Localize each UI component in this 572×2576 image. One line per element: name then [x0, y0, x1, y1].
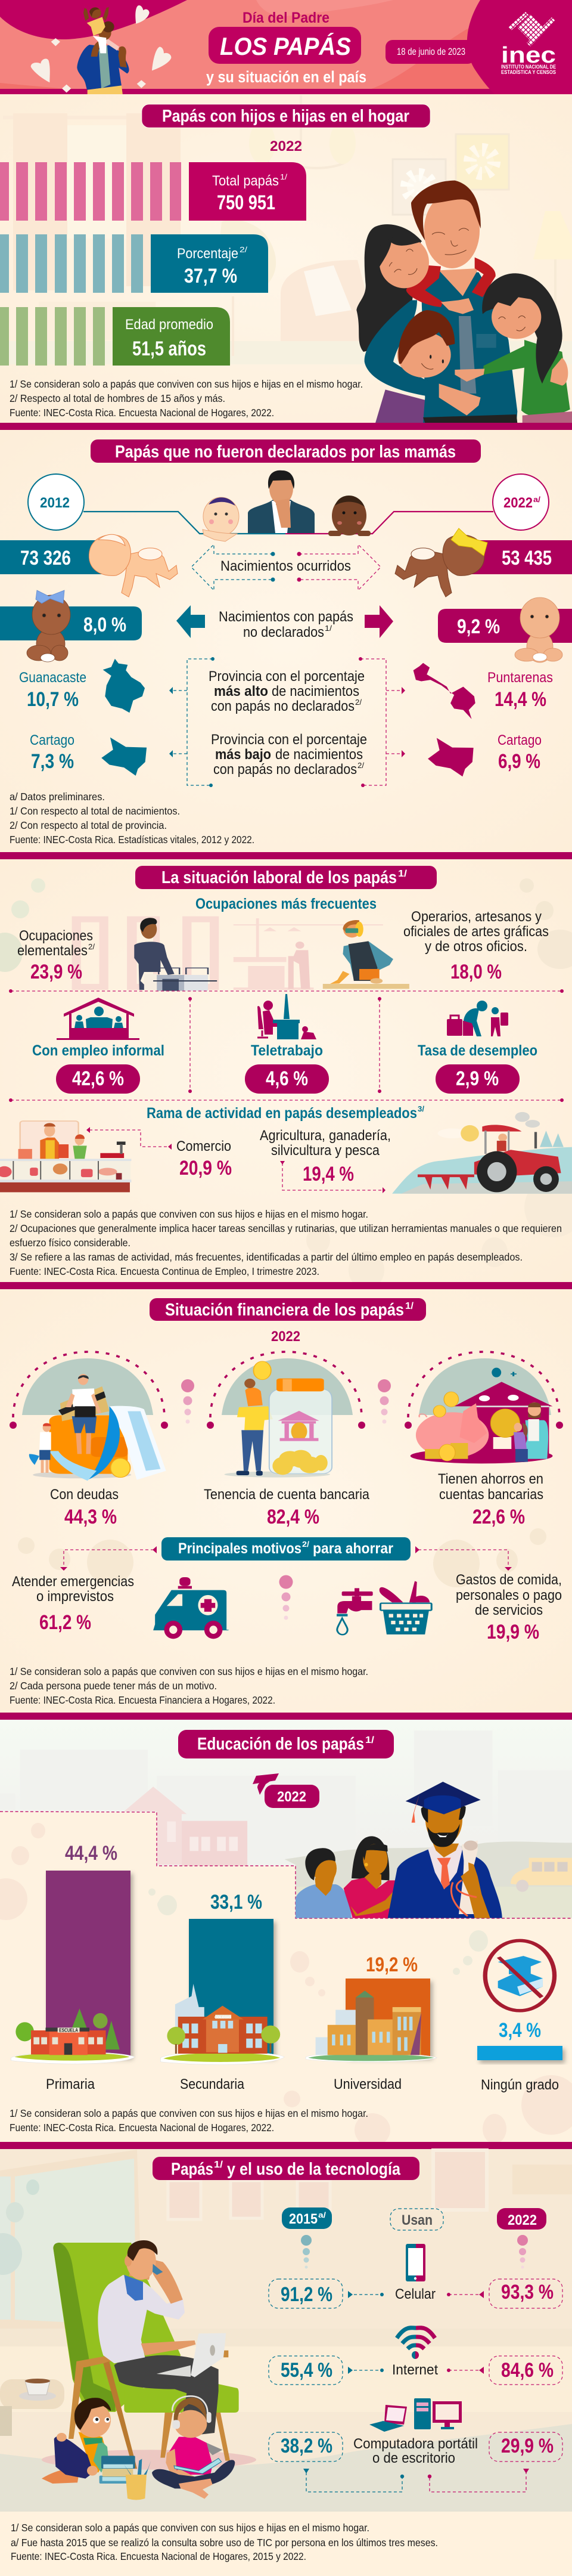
map: Cartago magenta — [428, 738, 474, 776]
section divider — [0, 423, 572, 430]
dashed arrows: motivos — [60, 1546, 512, 1571]
row: computadora — [269, 2432, 562, 2492]
stat bar: porcentaje — [0, 234, 268, 293]
footnotes — [10, 791, 254, 846]
illustration: father with child on shoulders — [77, 7, 129, 95]
section divider — [0, 1713, 572, 1720]
footnotes: Fuente: INEC-Costa Rica. Encuesta Nacional de Hogares, 2022. — [10, 407, 274, 419]
stat: Guanacaste: Guanacaste — [19, 670, 86, 686]
circle: 2022: 2022 — [503, 495, 533, 511]
text: provincia porcentaje más alto — [209, 668, 365, 714]
background bubbles — [0, 1823, 572, 2147]
stat bar: total papás — [0, 162, 306, 221]
row: computadora: o de escritorio — [372, 2450, 455, 2466]
band: 53 435: 53 435 — [502, 547, 552, 569]
stat: operarios: y de otros oficios. — [425, 939, 527, 955]
stat: gastos: de servicios — [475, 1602, 543, 1618]
heading: Papás con hijos e hijas en el hogar — [162, 107, 409, 126]
bar: primaria — [46, 1842, 130, 2057]
footnotes — [10, 1665, 368, 1706]
footnotes: 1/ Se consideran solo a papás que conviven con sus hijos e hijas en el mismo hogar. — [10, 1208, 368, 1220]
illustration: baby top left — [203, 497, 239, 541]
arrows: nacimientos con papás no declarados — [176, 605, 393, 640]
stat: Guanacaste: 10,7 % — [27, 688, 79, 711]
stat: con deudas: 44,3 % — [64, 1506, 117, 1528]
illustration: sleeping baby right — [395, 528, 487, 597]
map: Cartago teal — [101, 738, 147, 776]
icon: food basket — [380, 1581, 431, 1634]
stat: con deudas: Con deudas — [50, 1487, 119, 1503]
section divider — [0, 2142, 572, 2149]
pill: 2015: a/ — [318, 2210, 326, 2219]
stat: Puntarenas: Puntarenas — [487, 670, 553, 686]
footnotes — [10, 378, 363, 419]
footnotes: esfuerzo físico considerable. — [10, 1237, 130, 1249]
footnotes: Fuente: INEC-Costa Rica. Estadísticas vitales, 2012 y 2022. — [10, 834, 254, 846]
stat: ahorros — [438, 1471, 543, 1528]
connector lines — [83, 512, 493, 534]
row: celular: Celular — [395, 2286, 436, 2302]
labels: education levels: Secundaria — [180, 2076, 245, 2092]
footnotes: 1/ Se consideran solo a papás que conviven con sus hijos e hijas en el mismo hogar. — [10, 2107, 368, 2119]
circle: 2022: a/ — [533, 495, 540, 504]
footnotes — [10, 1208, 562, 1277]
icon: wifi — [397, 2328, 435, 2359]
stat bar: porcentaje: 2/ — [240, 245, 247, 254]
pill: Los papás — [209, 27, 361, 64]
logo: INEC — [501, 12, 556, 75]
row: computadora: Computadora portátil — [353, 2436, 478, 2452]
stat: gastos: Gastos de comida, — [456, 1572, 562, 1588]
stat: emergencias — [12, 1574, 134, 1634]
band: 9,2 % — [438, 609, 572, 643]
illustration: worker at machine — [134, 918, 217, 991]
stat: con deudas — [50, 1487, 119, 1528]
pill: date: 18 de junio de 2023 — [397, 46, 465, 57]
stat: ocupaciones elementales: 23,9 % — [30, 961, 82, 983]
stat: Cartago 2012 — [30, 732, 74, 773]
decoration: bubbles — [279, 1575, 293, 1620]
pill: principales motivos: Principales motivos — [178, 1540, 301, 1557]
dashed stepped outline — [0, 1812, 572, 1918]
stat: gastos: personales o pago — [456, 1587, 562, 1603]
row: internet: 55,4 % — [281, 2359, 332, 2382]
footnotes: 2/ Cada persona puede tener más de un motivo. — [10, 1680, 217, 1692]
section divider — [0, 1282, 572, 1289]
pill: 2015: 2015 — [289, 2211, 318, 2227]
stat: ocupaciones elementales: Ocupaciones — [19, 928, 93, 944]
background city — [0, 1730, 572, 1918]
panel: situación financiera — [0, 1289, 572, 1713]
stat: comercio: 20,9 % — [179, 1157, 232, 1179]
stat: ahorros: Tienen ahorros en — [438, 1471, 543, 1487]
footnotes: 2/ Respecto al total de hombres de 15 años y más. — [10, 392, 225, 404]
text: provincia porcentaje más bajo: de nacimientos — [275, 747, 363, 763]
panel: situación laboral — [0, 859, 572, 1289]
pill: principales motivos: para ahorrar — [313, 1540, 393, 1557]
bar: universidad: 19,2 % — [366, 1953, 418, 1976]
footnotes: Fuente: INEC-Costa Rica. Encuesta Nacional de Hogares, 2015 y 2022. — [11, 2550, 306, 2562]
row: internet: 84,6 % — [501, 2359, 554, 2382]
bar: universidad — [346, 1953, 430, 2057]
section divider — [0, 852, 572, 859]
stat: ocupaciones elementales — [17, 928, 95, 983]
illustration: escuela: ESCUELA — [59, 2027, 78, 2033]
logo: INEC: ESTADÍSTICA Y CENSOS — [501, 69, 556, 75]
band: 9,2 %: 9,2 % — [457, 615, 500, 638]
circle: 2012 — [28, 474, 84, 530]
stat: operarios: Operarios, artesanos y — [411, 909, 542, 925]
heading: Educación de los papás — [197, 1735, 364, 1754]
stat: teletrabajo: 4,6 % — [266, 1067, 308, 1090]
pill: 2022 — [265, 1785, 319, 1808]
text: provincia porcentaje más bajo: Provincia con el porcentaje — [211, 732, 367, 748]
panel: tecnología — [0, 2149, 572, 2576]
stat: agricultura: Agricultura, ganadería, — [260, 1128, 391, 1144]
icon: hearts and diamonds — [31, 5, 171, 92]
pill: principales motivos: 2/ — [302, 1540, 309, 1549]
stat: operarios: oficiales de artes gráficas — [403, 924, 549, 940]
illustration: colegio: COLEGIO — [214, 2015, 231, 2020]
background bubbles — [0, 878, 572, 1289]
stat: tasa de desempleo: Tasa de desempleo — [418, 1042, 537, 1059]
stat: agricultura — [260, 1128, 391, 1185]
text: provincia porcentaje más bajo: con papás no declarados — [213, 761, 357, 778]
illustration: tractor — [392, 1112, 572, 1194]
illustration: sitting baby right — [515, 597, 562, 662]
arrows: nacimientos con papás no declarados: no declarados — [243, 624, 324, 640]
dashed arrow: comercio — [86, 1127, 172, 1150]
illustration: wallet and receipt — [29, 1374, 166, 1481]
illustration: father on chair with children — [42, 2240, 256, 2500]
heading: y el uso de la tecnología — [227, 2160, 401, 2179]
band: 53 435 — [471, 540, 572, 574]
stat: Cartago 2022: 6,9 % — [498, 750, 540, 773]
pill: 2022 — [497, 2208, 546, 2230]
text: provincia porcentaje más alto: más alto — [214, 683, 268, 699]
illustration: universidad — [306, 1990, 437, 2062]
row: internet: Internet — [392, 2362, 438, 2378]
stat: gastos: 19,9 % — [487, 1621, 539, 1643]
dashed bracket: provincias — [169, 657, 405, 787]
footnotes — [11, 2522, 438, 2562]
icon: ambulance — [153, 1577, 229, 1639]
footnotes — [10, 2107, 368, 2134]
stat: cuenta bancaria: 82,4 % — [267, 1506, 319, 1528]
circle: 2012: 2012 — [40, 495, 70, 511]
cream stepped background — [0, 1812, 572, 2142]
band: 73 326: 73 326 — [20, 547, 71, 569]
stat: Cartago 2022 — [498, 732, 542, 773]
labels: education levels: Primaria — [46, 2076, 95, 2092]
illustration: jar of coins — [225, 1361, 332, 1478]
heading: Papás — [171, 2160, 213, 2179]
bar: ningún grado: 3,4 % — [499, 2019, 541, 2042]
dashed hexagon: nacimientos ocurridos — [191, 544, 381, 590]
labels: education levels — [46, 2076, 559, 2093]
pill: usan: Usan — [402, 2212, 433, 2228]
logo: INEC: inec — [501, 43, 556, 68]
illustration: graduate family — [296, 1782, 502, 1918]
text: year: 2022 — [271, 1329, 300, 1345]
labels: education levels: Ningún grado — [481, 2077, 559, 2093]
dashed dividers — [9, 989, 564, 1102]
text: provincia porcentaje más bajo — [211, 732, 367, 778]
stat: empleo informal — [32, 998, 164, 1094]
footnotes: 1/ Se consideran solo a papás que conviven con sus hijos e hijas en el mismo hogar. — [11, 2522, 369, 2534]
text: provincia porcentaje más bajo: 2/ — [358, 761, 364, 770]
band: 8,0 %: 8,0 % — [83, 614, 126, 636]
stat: tasa de desempleo — [418, 1001, 537, 1094]
heading: Papás que no fueron declarados por las mamás — [115, 442, 456, 462]
decoration: bubbles — [181, 1379, 391, 1424]
stat: tasa de desempleo: 2,9 % — [456, 1067, 499, 1090]
footnotes: 2/ Con respecto al total de provincia. — [10, 819, 167, 831]
footnotes: 3/ Se refiere a las ramas de actividad, más frecuentes, identificadas a partir del último empleo en papás desempleados. — [10, 1251, 523, 1263]
stat: cuenta bancaria: Tenencia de cuenta bancaria — [204, 1487, 370, 1503]
text: provincia porcentaje más alto: con papás no declarados — [211, 698, 355, 714]
heading: 1/ — [365, 1735, 375, 1745]
text: subtitle: y su situación en el país — [206, 68, 366, 86]
illustration: sleeping baby left — [89, 534, 178, 597]
arrows: nacimientos con papás no declarados: Nacimientos con papás — [219, 609, 353, 625]
footnotes: Fuente: INEC-Costa Rica. Encuesta Financiera a Hogares, 2022. — [10, 1694, 275, 1706]
band: 73 326 — [0, 540, 104, 574]
decoration: dashed arcs and domes — [10, 1352, 563, 1429]
footnotes: 1/ Con respecto al total de nacimientos. — [10, 805, 180, 817]
background: workshop silhouettes — [72, 917, 383, 990]
decoration: bubbles — [301, 2235, 528, 2268]
stat: agricultura: silvicultura y pesca — [271, 1143, 380, 1159]
map: Guanacaste — [103, 659, 145, 713]
circle: 2022 — [493, 474, 549, 530]
stat bar: total papás: 750 951 — [217, 191, 275, 214]
icon: phone — [406, 2244, 425, 2281]
stat: cuenta bancaria — [204, 1487, 370, 1528]
panel: papás con hijos e hijas en el hogar — [0, 94, 572, 423]
row: internet — [269, 2356, 562, 2385]
stat bar: total papás: Total papás — [212, 173, 279, 189]
stat: Puntarenas — [487, 670, 553, 711]
stat: comercio: Comercio — [176, 1138, 231, 1154]
footnotes: Fuente: INEC-Costa Rica. Encuesta Nacional de Hogares, 2022. — [10, 2122, 274, 2134]
bar: secundaria — [189, 1891, 273, 2057]
stat: operarios: 18,0 % — [450, 961, 502, 983]
arrows: nacimientos con papás no declarados: 1/ — [325, 624, 332, 633]
footnotes: a/ Datos preliminares. — [10, 791, 105, 803]
pill: date — [386, 40, 475, 64]
illustration: baby top right — [328, 496, 371, 536]
stat bar: porcentaje: 37,7 % — [184, 265, 237, 287]
subheading: rama de actividad: Rama de actividad en papás desempleados — [147, 1105, 417, 1122]
stat: empleo informal: 42,6 % — [72, 1067, 124, 1090]
dashed arrow: agricultura — [280, 1161, 386, 1193]
pill: Los papás: LOS PAPÁS — [220, 32, 351, 60]
stat: Cartago 2012: 7,3 % — [31, 750, 74, 773]
stat bar: edad promedio: Edad promedio — [125, 317, 213, 333]
pill: 2015 — [282, 2207, 332, 2229]
stat: ocupaciones elementales: 2/ — [88, 942, 95, 951]
stat: gastos — [456, 1572, 562, 1643]
illustration: carpenter — [323, 920, 409, 989]
row: celular: 91,2 % — [281, 2283, 332, 2306]
stat: emergencias: o imprevistos — [36, 1589, 114, 1605]
stat: comercio — [176, 1138, 232, 1179]
text: provincia porcentaje más alto: de nacimientos — [272, 683, 359, 699]
stat bar: edad promedio — [0, 307, 230, 366]
illustration: piggy bank — [411, 1368, 552, 1463]
stat: agricultura: 19,4 % — [303, 1163, 354, 1185]
background room — [0, 2150, 572, 2512]
footnotes: 1/ Se consideran solo a papás que conviven con sus hijos e hijas en el mismo hogar. — [10, 1665, 368, 1677]
bar: primaria: 44,4 % — [65, 1842, 117, 1865]
stat: emergencias: 61,2 % — [39, 1611, 91, 1634]
labels: education levels: Universidad — [334, 2076, 402, 2092]
row: computadora: 29,9 % — [501, 2435, 554, 2457]
icon: graduation cap — [253, 1773, 279, 1795]
footnotes: a/ Fue hasta 2015 que se realizó la consulta sobre uso de TIC por persona en los últimos tres meses. — [11, 2537, 438, 2549]
stat: ocupaciones elementales: elementales — [17, 943, 88, 959]
logo: INEC: INSTITUTO NACIONAL DE — [501, 64, 556, 70]
subheading: ocupaciones: Ocupaciones más frecuentes — [195, 896, 377, 912]
stat: emergencias: Atender emergencias — [12, 1574, 134, 1590]
illustration: sitting baby left — [27, 590, 70, 662]
icon: no education — [485, 1940, 555, 2011]
stat: Cartago 2022: Cartago — [498, 732, 542, 748]
stat: teletrabajo — [245, 994, 329, 1094]
panel: papás no declarados — [0, 430, 572, 852]
heading: Situación financiera de los papás — [165, 1301, 404, 1320]
illustration: butcher shop — [0, 1121, 131, 1192]
illustration: man thinking — [248, 470, 315, 533]
heading: 1/ — [398, 869, 408, 879]
illustration: escuela — [11, 2008, 135, 2064]
stat bar: porcentaje: Porcentaje — [177, 246, 238, 262]
footnotes: 1/ Se consideran solo a papás que conviven con sus hijos e hijas en el mismo hogar. — [10, 378, 363, 390]
heading — [153, 2157, 419, 2180]
map: Puntarenas — [414, 663, 475, 719]
illustration: coffee cup — [19, 2379, 56, 2401]
row: computadora: 38,2 % — [281, 2435, 332, 2457]
icon: faucet — [337, 1588, 373, 1634]
stat: Cartago 2012: Cartago — [30, 732, 74, 748]
row: celular — [269, 2279, 562, 2308]
stat: empleo informal: Con empleo informal — [32, 1042, 164, 1059]
footnotes: Fuente: INEC-Costa Rica. Encuesta Continua de Empleo, I trimestre 2023. — [10, 1265, 319, 1277]
stat: Puntarenas: 14,4 % — [495, 688, 546, 711]
header banner — [0, 0, 572, 95]
row: celular: 93,3 % — [501, 2281, 554, 2303]
band: 8,0 % — [0, 606, 142, 640]
stat: ahorros: 22,6 % — [472, 1506, 525, 1528]
text: Día del Padre: Día del Padre — [243, 10, 329, 26]
stat: Guanacaste — [19, 670, 86, 711]
icon: computers — [369, 2398, 462, 2432]
stat: teletrabajo: Teletrabajo — [251, 1042, 323, 1059]
text: provincia porcentaje más bajo: más bajo — [215, 747, 271, 763]
pill: usan — [390, 2209, 443, 2230]
text: year: 2022 — [270, 138, 302, 154]
pill: 2022: 2022 — [508, 2212, 537, 2228]
pill: 2022: 2022 — [277, 1789, 306, 1805]
stat bar: total papás: 1/ — [280, 172, 287, 181]
heading: 1/ — [405, 1301, 414, 1311]
bar: secundaria: 33,1 % — [210, 1891, 262, 1914]
background room — [0, 95, 572, 364]
text: provincia porcentaje más alto: Provincia con el porcentaje — [209, 668, 365, 685]
subheading: rama de actividad: 3/ — [418, 1104, 424, 1113]
stat: ahorros: cuentas bancarias — [439, 1487, 543, 1503]
dashed hexagon: nacimientos ocurridos: Nacimientos ocurridos — [220, 558, 351, 574]
pill: principales motivos — [161, 1537, 411, 1561]
panel: educación — [0, 1720, 572, 2147]
bar: ningún grado — [477, 2019, 562, 2060]
heading: La situación laboral de los papás — [161, 868, 397, 887]
illustration: colegio — [160, 1984, 285, 2064]
illustration: father hugging children — [356, 181, 572, 423]
heading: 1/ — [214, 2160, 223, 2170]
stat: operarios — [403, 909, 549, 983]
text: provincia porcentaje más alto: 2/ — [355, 698, 362, 707]
background bubbles — [18, 1528, 546, 1587]
heading — [178, 1730, 394, 1758]
stat bar: edad promedio: 51,5 años — [132, 338, 206, 360]
